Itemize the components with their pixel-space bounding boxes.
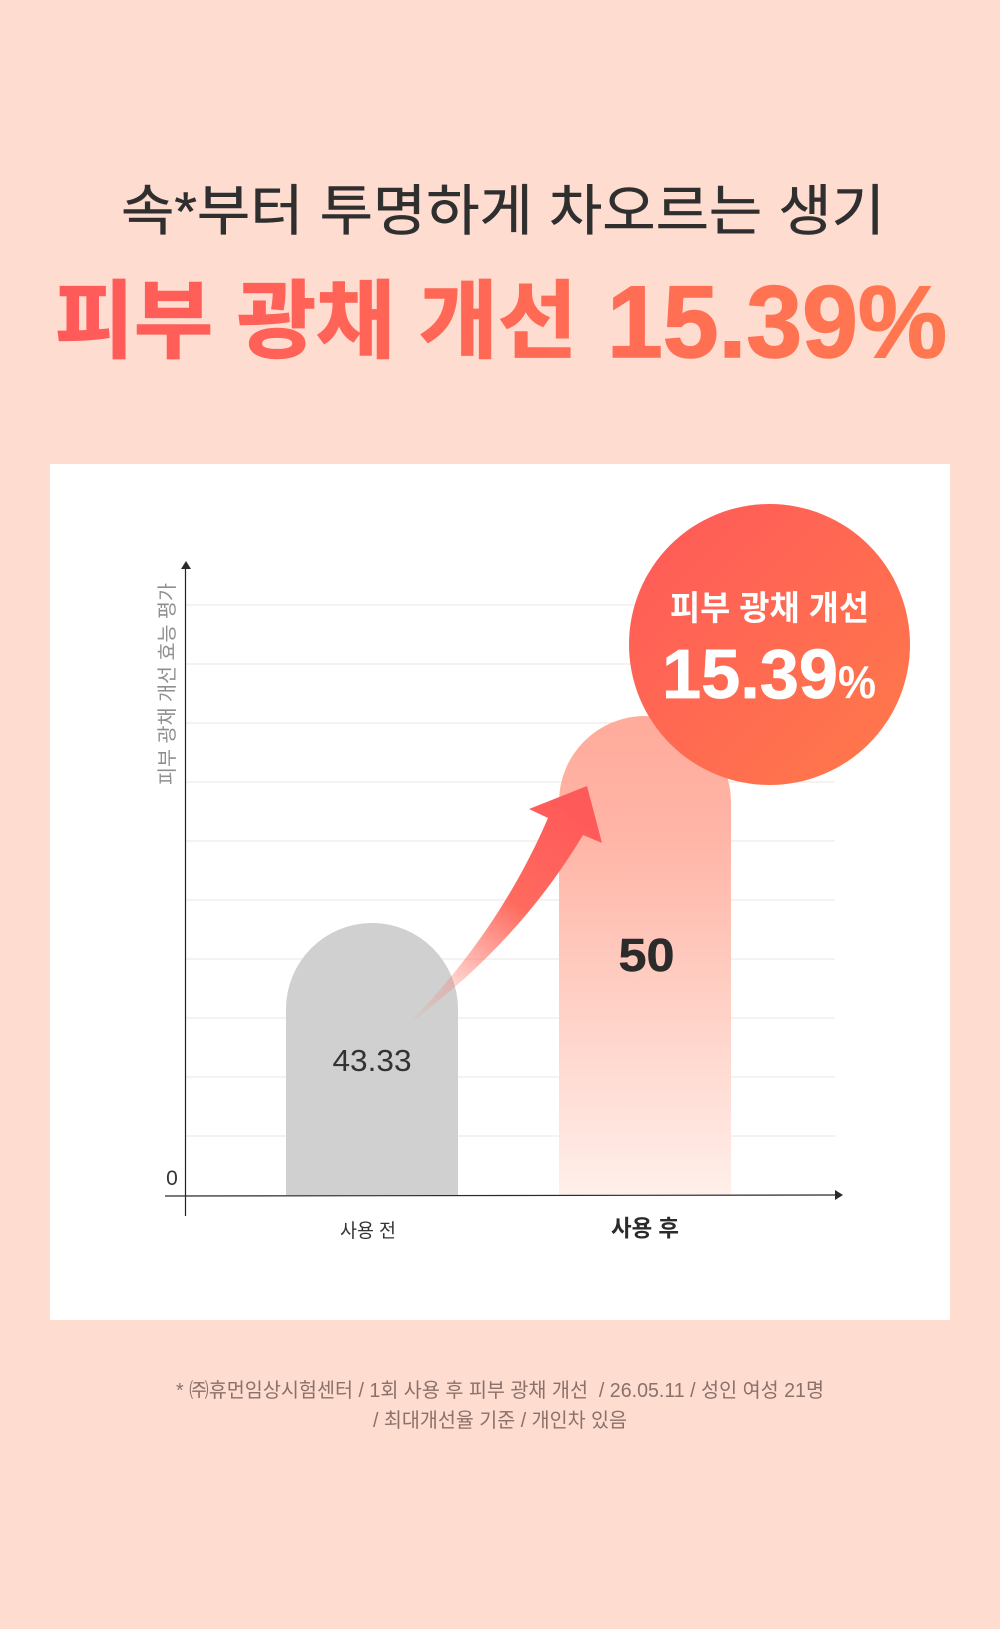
callout label: 피부 광채 개선 (670, 590, 869, 628)
footnote: / 최대개선율 기준 / 개인차 있음 (373, 1409, 627, 1432)
x label: after: 사용 후 (611, 1215, 679, 1241)
bar: before use (286, 923, 458, 1195)
axis zero label: 0 (166, 1167, 178, 1190)
footnote (176, 1379, 824, 1432)
heading: main claim: 15.39% (607, 265, 947, 379)
panel: chart card (50, 464, 950, 1320)
arrow: growth (405, 786, 602, 1027)
callout value: 15.39 (662, 635, 838, 713)
bar: after use (559, 716, 731, 1195)
callout value: % (838, 656, 876, 708)
x axis (165, 1190, 843, 1200)
x label: before: 사용 전 (340, 1220, 396, 1242)
heading: subtitle: 속*부터 투명하게 차오르는 생기 (121, 180, 885, 242)
footnote: * ㈜휴먼임상시험센터 / 1회 사용 후 피부 광채 개선 / 26.05.11 / 성인 여성 21명 (176, 1379, 824, 1402)
heading: main claim (55, 265, 947, 379)
y axis (181, 561, 191, 1216)
callout: result circle (629, 504, 910, 785)
value: before: 43.33 (332, 1043, 412, 1078)
grid lines (186, 605, 835, 1136)
y axis title: 피부 광채 개선 효능 평가 (156, 583, 179, 785)
heading: main claim: 피부 광채 개선 (55, 275, 577, 370)
value: after: 50 (618, 929, 674, 981)
